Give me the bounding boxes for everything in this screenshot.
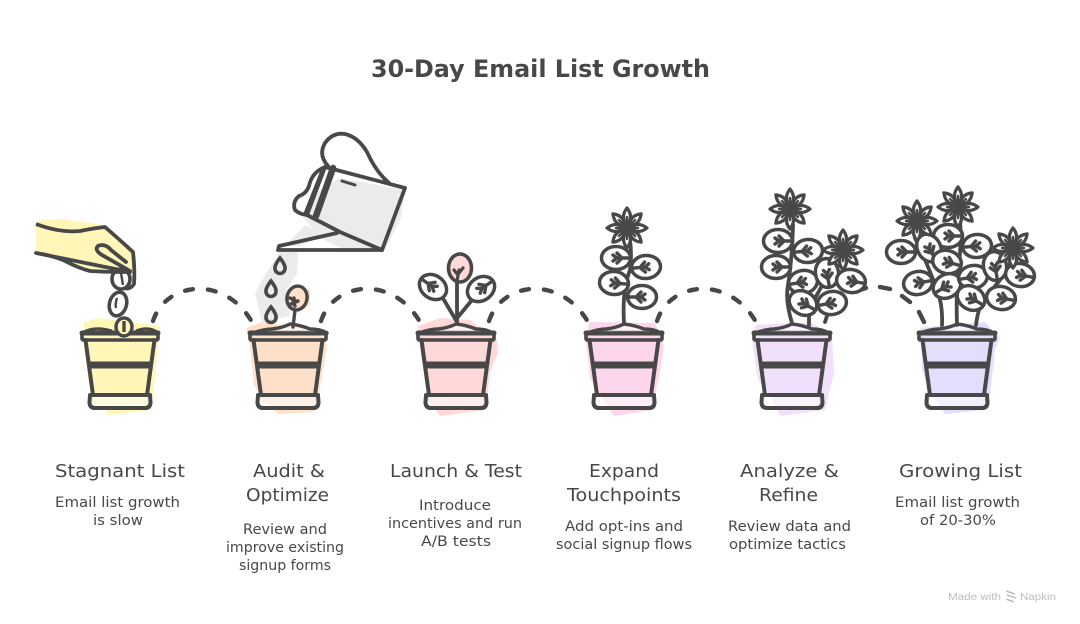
label: analyze and refine: [728, 461, 851, 553]
label: stagnant list: Email list growth: [55, 495, 180, 511]
pot 5: [754, 333, 830, 408]
label: audit and optimize: Review and: [243, 522, 327, 538]
wash: peach pot: [246, 322, 327, 414]
icon: watering can: [278, 134, 405, 250]
step 2: audit and optimize illustration: [246, 134, 405, 414]
step 6: growing list illustration: [886, 187, 1036, 414]
label: launch and test: incentives and run: [388, 516, 522, 532]
step 5: analyze and refine illustration: [752, 189, 867, 416]
watermark: [948, 591, 1056, 603]
soil and planted seed: [84, 318, 157, 336]
label: stagnant list: [55, 461, 185, 529]
label: launch and test: [388, 461, 522, 550]
plant: three flowers and twelve leaves: [886, 187, 1036, 325]
label: analyze and refine: optimize tactics: [729, 537, 846, 553]
step 4: expand touchpoints illustration: [586, 208, 664, 416]
label: audit and optimize: improve existing: [226, 540, 344, 556]
label: expand touchpoints: [556, 461, 692, 553]
wash: pink pot: [418, 318, 498, 416]
pot 4: [586, 333, 662, 408]
label: analyze and refine: Analyze &: [740, 461, 839, 482]
label: analyze and refine: Refine: [759, 485, 818, 506]
label: audit and optimize: Audit &: [253, 461, 325, 482]
label: expand touchpoints: social signup flows: [556, 537, 692, 553]
label: stagnant list: is slow: [93, 513, 143, 529]
label: audit and optimize: [226, 461, 344, 574]
label: expand touchpoints: Touchpoints: [566, 485, 681, 506]
wash: rose pot and flower: [586, 322, 664, 416]
label: growing list: Growing List: [899, 461, 1022, 482]
label: launch and test: Introduce: [419, 498, 491, 514]
pot 3: [418, 333, 494, 408]
label: growing list: [895, 461, 1022, 529]
pot 2: [250, 333, 326, 408]
title: 30-Day Email List Growth: [371, 55, 710, 83]
watermark: Napkin: [1020, 591, 1056, 603]
connector arcs: [153, 287, 924, 322]
wash: gray water: [303, 178, 405, 250]
plant: flower and four leaves: [599, 208, 661, 323]
label: analyze and refine: Review data and: [728, 519, 851, 535]
label: launch and test: Launch & Test: [390, 461, 522, 482]
step 3: launch and test illustration: [415, 254, 499, 416]
label: expand touchpoints: Expand: [589, 461, 659, 482]
watermark: Made with: [948, 591, 1001, 603]
label: expand touchpoints: Add opt-ins and: [565, 519, 683, 535]
label: audit and optimize: signup forms: [239, 558, 331, 574]
icon: water drops: [266, 258, 285, 322]
label: growing list: of 20-30%: [920, 513, 996, 529]
label: launch and test: A/B tests: [421, 534, 491, 550]
plant: two flowers and eight leaves: [762, 189, 867, 325]
label: stagnant list: Stagnant List: [55, 461, 185, 482]
plant: three leaves: [415, 254, 499, 323]
label: audit and optimize: Optimize: [246, 485, 329, 506]
wash: yellow pot: [84, 318, 160, 415]
pot 6: [919, 333, 995, 408]
falling seed: [107, 290, 129, 318]
icon: hand holding seed: [36, 219, 134, 289]
wash: lavender pot: [920, 322, 1000, 414]
step 1: stagnant list illustration: [36, 219, 160, 415]
wash: lilac pot: [752, 322, 834, 416]
label: growing list: Email list growth: [895, 495, 1020, 511]
pot 1: [82, 333, 158, 408]
sprout: [285, 284, 309, 327]
